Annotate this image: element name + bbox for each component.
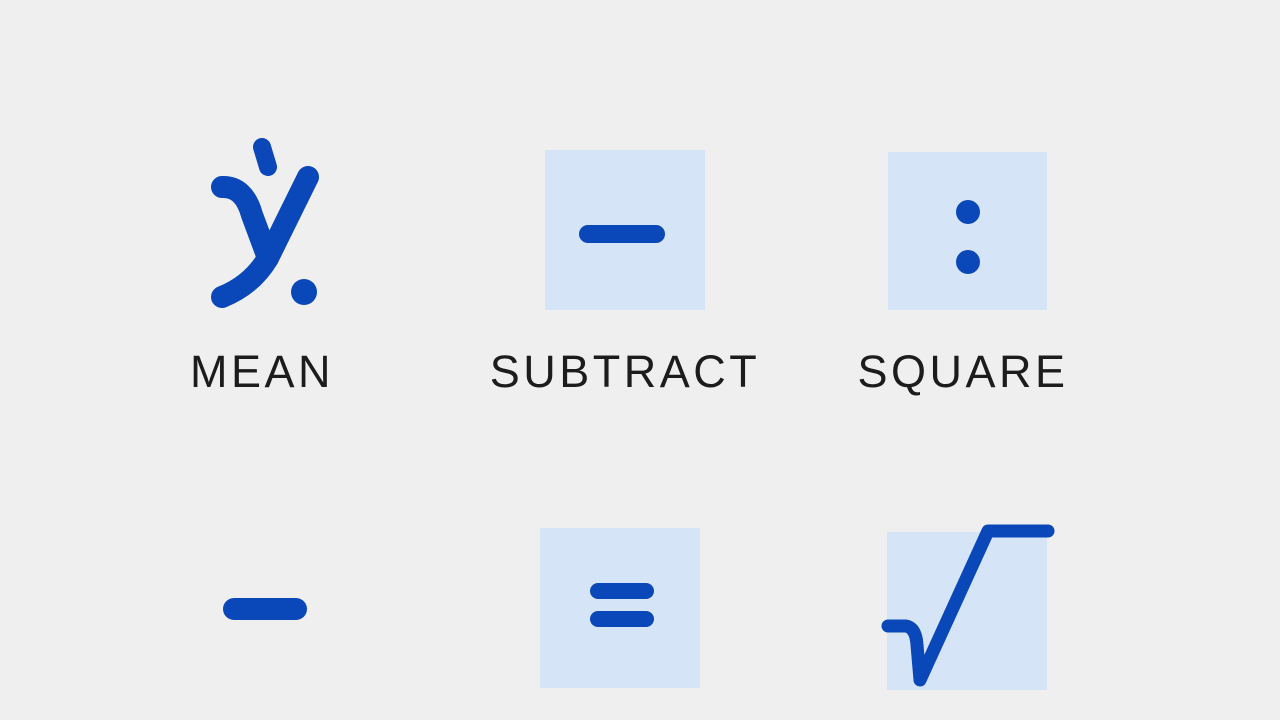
icon: square colon box	[888, 152, 1047, 310]
icon: minus	[234, 598, 296, 620]
icon: square root box	[887, 531, 1048, 690]
label: SUBTRACT: SUBTRACT	[490, 346, 760, 397]
label: MEAN: MEAN	[190, 346, 334, 397]
label: SQUARE: SQUARE	[857, 346, 1069, 397]
icon: equals box	[540, 528, 700, 688]
icon: mean y-bar	[222, 147, 317, 305]
icon: subtract box	[545, 150, 705, 310]
